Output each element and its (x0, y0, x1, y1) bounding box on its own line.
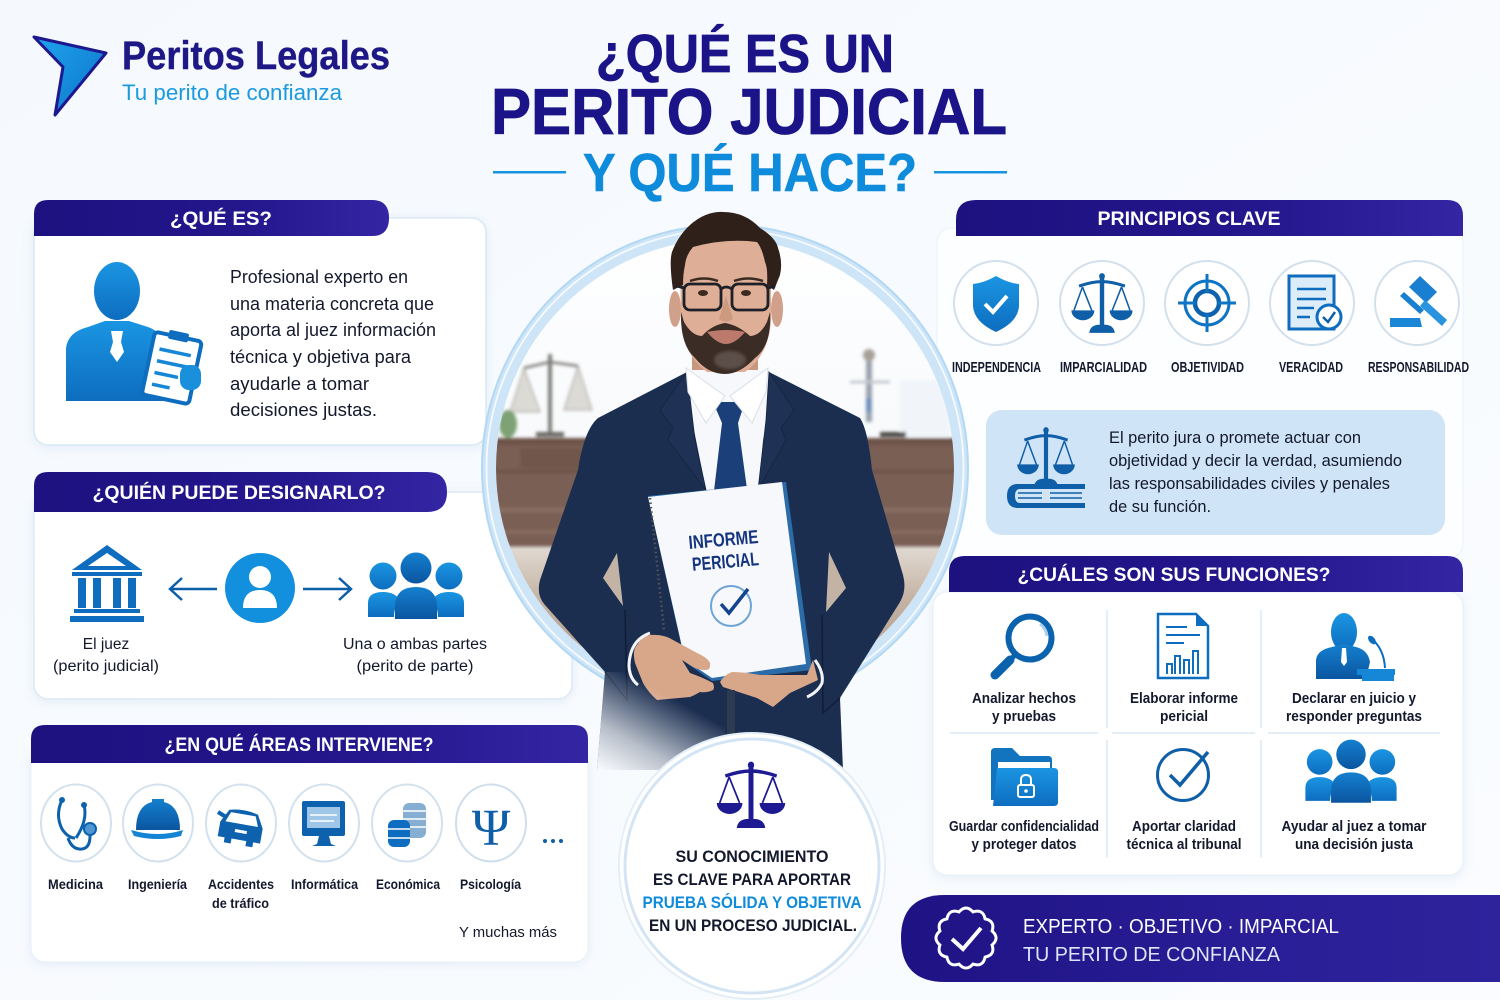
label: and many more: Y muchas más (459, 924, 557, 941)
logo tagline: Tu perito de confianza (122, 80, 343, 105)
icon: engineering (123, 784, 193, 862)
icon: group (1305, 740, 1397, 803)
panel: quién puede designarlo (34, 472, 572, 699)
lapels (660, 372, 794, 490)
heading: quién puede designarlo (34, 472, 447, 512)
banner: tagline (901, 895, 1500, 982)
courtroom background (496, 244, 954, 648)
panel: qué es (34, 200, 486, 445)
report (648, 482, 812, 681)
report: INFORME (688, 527, 759, 554)
icon: scales (717, 762, 785, 828)
labels: principles: VERACIDAD (1279, 359, 1343, 376)
sleeve seams (605, 610, 840, 713)
icon: courthouse (70, 545, 144, 622)
labels: functions: y proteger datos (972, 837, 1076, 853)
labels: areas (48, 876, 521, 911)
central portrait (482, 212, 968, 770)
icon: testifying (1316, 613, 1395, 681)
cuffs (629, 633, 822, 697)
icon: expert badge (225, 553, 295, 623)
icon: scales on book (1007, 427, 1085, 508)
labels: principles: INDEPENDENCIA (952, 359, 1041, 376)
labels: areas: de tráfico (212, 895, 269, 911)
text: tagline: TU PERITO DE CONFIANZA (1023, 944, 1281, 966)
logo name: Peritos Legales (122, 34, 390, 78)
heading: funciones (949, 556, 1463, 592)
shirt and belt (727, 690, 735, 734)
icon: parties group (368, 552, 464, 619)
nose (719, 296, 733, 322)
text: tagline: EXPERTO · OBJETIVO · IMPARCIAL (1023, 916, 1339, 938)
text: definition (230, 267, 436, 420)
icon: magnifier (995, 616, 1052, 675)
labels: functions: Ayudar al juez a tomar (1282, 819, 1427, 835)
logo (34, 34, 390, 115)
label: parties (343, 636, 487, 675)
text: key message (642, 848, 862, 935)
labels: functions: Elaborar informe (1130, 691, 1238, 707)
shirt (686, 370, 768, 494)
icon: psychology: Ψ (472, 800, 511, 857)
text: oath (1109, 429, 1402, 516)
text: definition: una materia concreta que (230, 294, 434, 314)
panel: principios clave (937, 200, 1469, 558)
icon: report (1158, 614, 1208, 678)
labels: functions: responder preguntas (1286, 709, 1422, 725)
icon: medicine (41, 784, 111, 862)
icon: shield (954, 261, 1038, 345)
labels: principles: OBJETIVIDAD (1171, 359, 1244, 376)
text: oath: las responsabilidades civiles y penales (1109, 475, 1390, 493)
title: Y QUÉ HACE? (583, 143, 917, 203)
title (491, 24, 1007, 203)
icon: computing (289, 784, 359, 862)
face (680, 236, 771, 372)
labels: functions: Declarar en juicio y (1292, 691, 1416, 707)
text: definition: decisiones justas. (230, 400, 377, 420)
labels: areas: Accidentes (208, 876, 274, 892)
title: PERITO JUDICIAL (491, 75, 1007, 148)
labels: functions: Aportar claridad (1132, 819, 1236, 835)
tie (713, 402, 747, 491)
labels: areas: Informática (291, 876, 358, 892)
text: key message: PRUEBA SÓLIDA Y OBJETIVA (642, 893, 862, 912)
suit (539, 372, 904, 770)
label: parties: Una o ambas partes (343, 636, 487, 653)
panel: funciones (933, 556, 1463, 875)
label: judge: El juez (83, 636, 129, 653)
heading: áreas (31, 725, 588, 763)
icon: target (1165, 261, 1249, 345)
heading: áreas: ¿EN QUÉ ÁREAS INTERVIENE? (164, 733, 434, 756)
panel: áreas (31, 725, 588, 962)
text: oath: objetividad y decir la verdad, asumiendo (1109, 452, 1402, 470)
icon: scales (1060, 261, 1144, 345)
icon: ellipsis (543, 839, 563, 843)
text: definition: ayudarle a tomar (230, 374, 369, 394)
text: oath: El perito jura o promete actuar con (1109, 429, 1361, 447)
label: parties: (perito de parte) (356, 658, 474, 675)
collar (686, 368, 768, 423)
heading: quién puede designarlo: ¿QUIÉN PUEDE DESIGNARLO? (92, 481, 386, 504)
text: key message: EN UN PROCESO JUDICIAL. (649, 917, 857, 935)
text: definition: Profesional experto en (230, 267, 408, 287)
heading: funciones: ¿CUÁLES SON SUS FUNCIONES? (1018, 563, 1330, 586)
text: definition: técnica y objetiva para (230, 347, 412, 367)
icon: seal (936, 908, 996, 968)
callout: oath (986, 410, 1445, 535)
heading: principios clave: PRINCIPIOS CLAVE (1098, 208, 1280, 230)
icon: expert with clipboard (66, 262, 203, 404)
text: key message: SU CONOCIMIENTO (676, 848, 829, 866)
labels: principles: IMPARCIALIDAD (1060, 359, 1147, 376)
text: oath: de su función. (1109, 498, 1211, 516)
labels: functions: pericial (1160, 709, 1208, 725)
neck (692, 345, 758, 398)
heading: qué es: ¿QUÉ ES? (170, 207, 272, 230)
ears (669, 291, 681, 327)
chin highlight (714, 351, 746, 369)
text: key message: ES CLAVE PARA APORTAR (653, 871, 851, 889)
glasses (677, 284, 775, 310)
mouth (707, 330, 745, 344)
icon: gavel (1375, 261, 1459, 345)
icon: logo arrow (34, 37, 106, 115)
icon: verified document (1270, 261, 1354, 345)
report: PERICIAL (691, 549, 760, 576)
rings (482, 225, 968, 711)
labels: areas: Psicología (460, 876, 521, 892)
icon: check (1158, 750, 1208, 800)
labels: functions: y pruebas (992, 709, 1056, 725)
icon: locked folder (991, 748, 1058, 806)
icon: psychology (456, 784, 526, 862)
icon: traffic (206, 784, 276, 862)
brows (690, 278, 763, 281)
labels: areas: Económica (376, 876, 440, 892)
text: tagline (1023, 916, 1339, 966)
text: definition: aporta al juez información (230, 320, 436, 340)
title: ¿QUÉ ES UN (596, 24, 894, 84)
man (539, 212, 904, 770)
label: judge (53, 636, 159, 675)
heading: qué es (34, 200, 389, 236)
labels: functions: Guardar confidencialidad (949, 819, 1099, 835)
arrow: to judge (170, 578, 217, 600)
labels: functions: una decisión justa (1295, 837, 1414, 853)
labels: areas: Ingeniería (128, 876, 187, 892)
hands (634, 635, 714, 700)
label: judge: (perito judicial) (53, 658, 159, 675)
labels: functions (949, 691, 1427, 853)
arm gaps (603, 552, 846, 612)
icon: economics (372, 784, 442, 862)
labels: areas: Medicina (48, 876, 103, 892)
labels: functions: Analizar hechos (972, 691, 1076, 707)
badge: key message (619, 733, 885, 999)
beard (681, 312, 770, 374)
lower fade (597, 672, 725, 770)
labels: principles (952, 359, 1469, 376)
labels: functions: técnica al tribunal (1126, 837, 1242, 853)
arrow: to parties (303, 578, 351, 600)
eyes (698, 290, 751, 296)
hair (671, 212, 781, 290)
heading: principios clave (956, 200, 1463, 236)
